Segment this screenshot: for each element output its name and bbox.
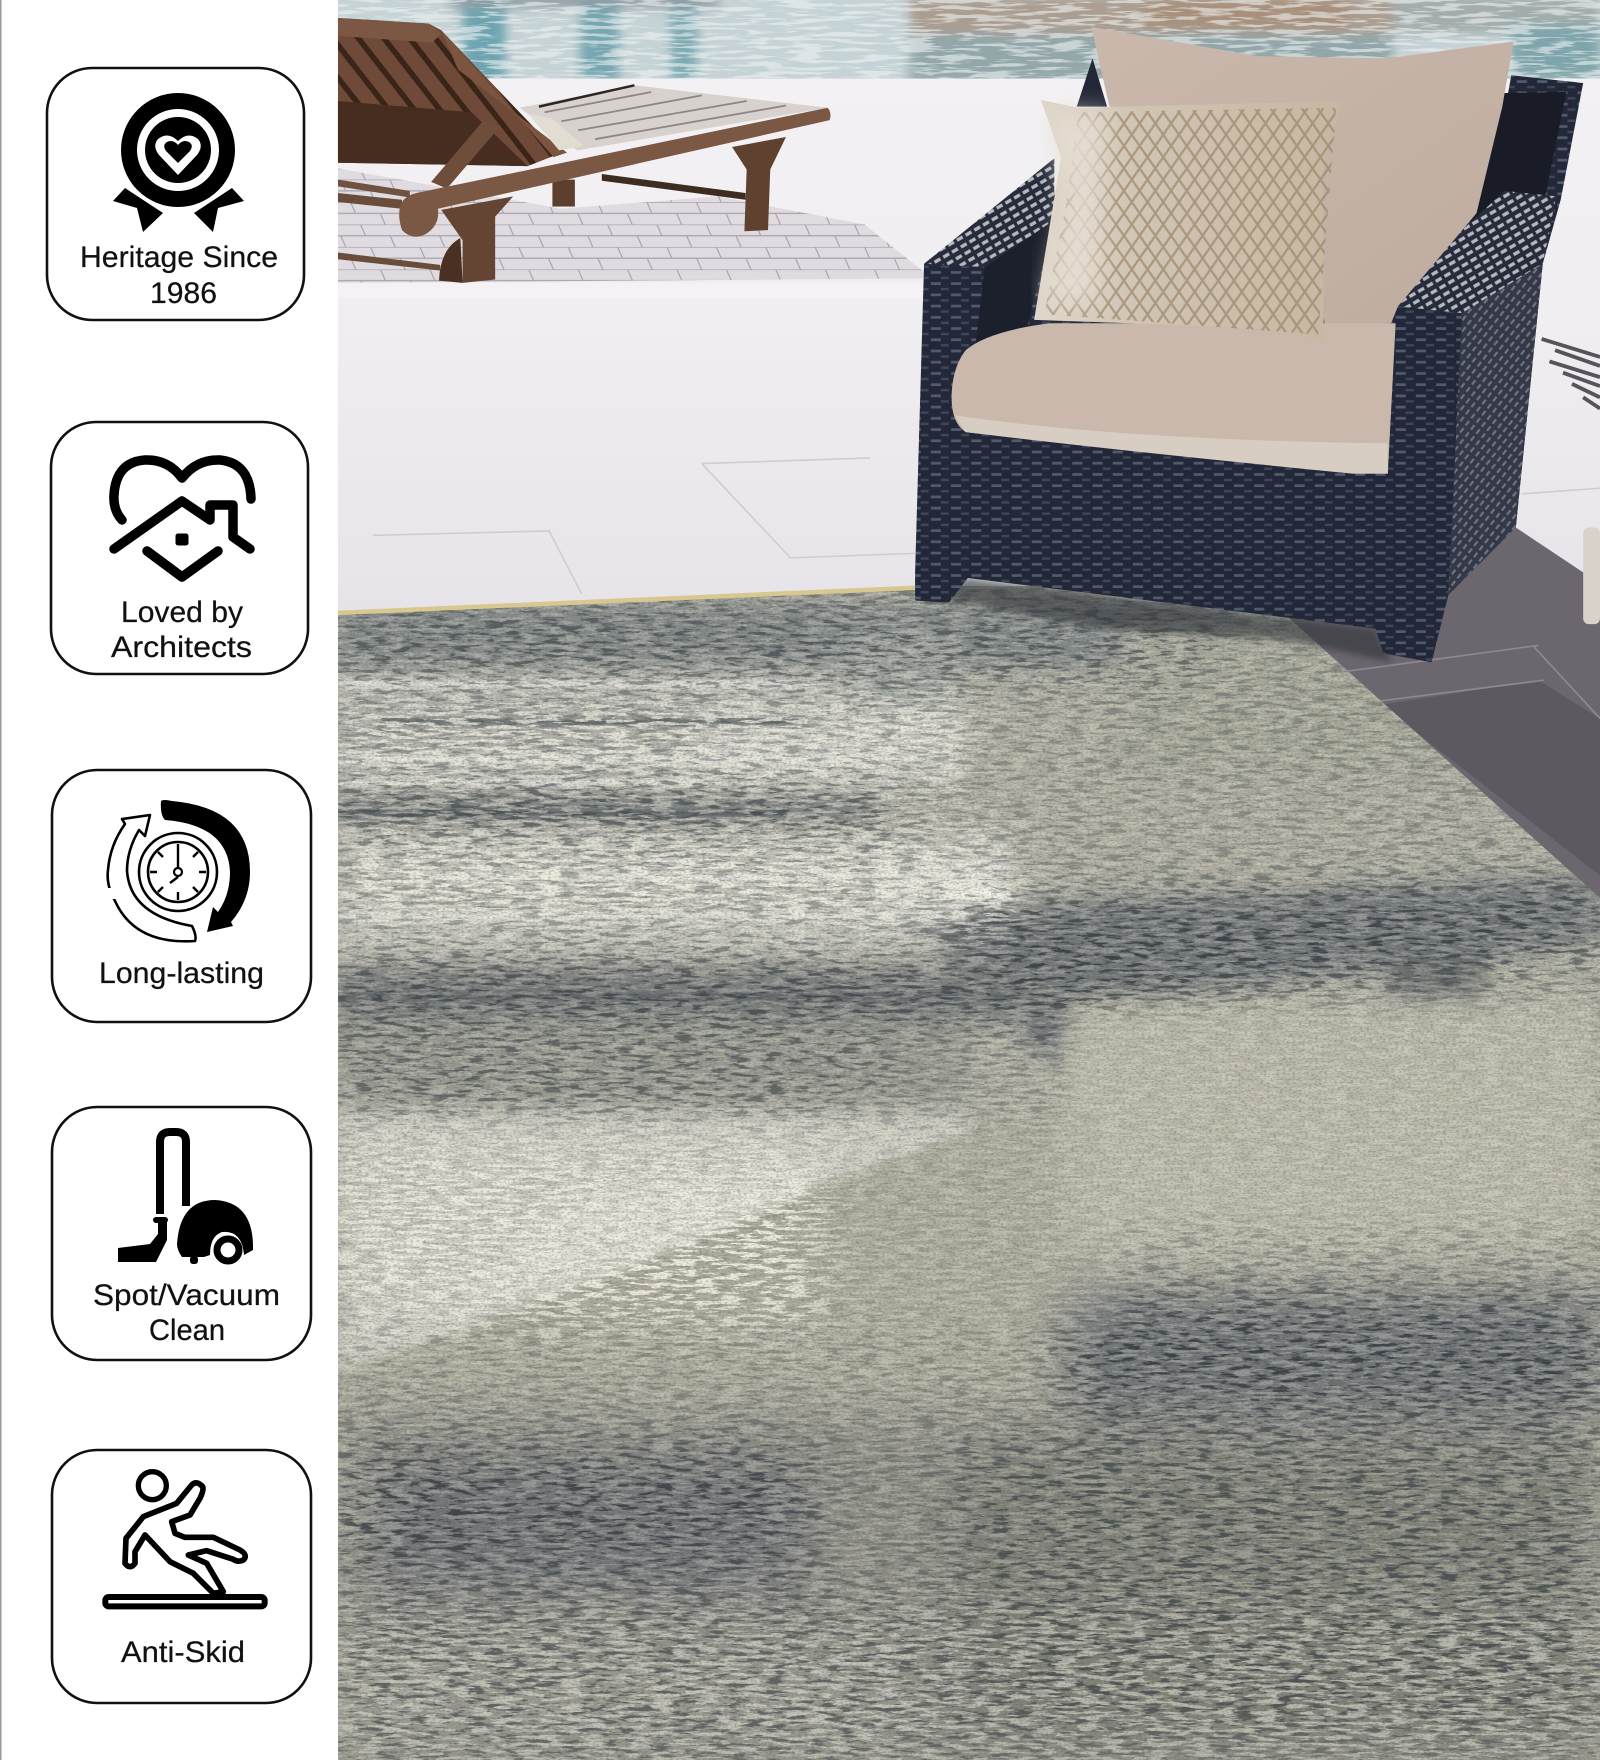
main board [399, 108, 831, 237]
throw pillow [1034, 100, 1342, 341]
rods [602, 174, 746, 200]
icon: award badge with heart [113, 101, 244, 232]
label: Clean [149, 1314, 225, 1347]
card outline [52, 1107, 311, 1360]
panel: lifestyle photo of rug and outdoor chair [338, 0, 1600, 1760]
photo: dark floor [1278, 528, 1600, 904]
rug speckle: light [338, 584, 1600, 1760]
panel: Anti-Skid [52, 1450, 311, 1703]
label [111, 596, 252, 664]
left arm top [924, 158, 1054, 267]
photo: pool water [338, 0, 1600, 85]
photo: white ledge shade [338, 283, 933, 299]
icon: heart and house [114, 460, 251, 577]
photo: wicker armchair [915, 27, 1583, 662]
label: Heritage Since [80, 241, 278, 274]
legs [732, 137, 786, 231]
photo: chair shadow on rug [921, 578, 1392, 662]
panel: Long-lasting [52, 770, 311, 1022]
card outline [52, 770, 311, 1022]
rug tone: dark lower patches [338, 1291, 1600, 1760]
seat cushion [952, 323, 1396, 474]
label: Long-lasting [99, 957, 264, 990]
seat slats [520, 85, 828, 150]
label [93, 1279, 280, 1347]
photo: rug gold edge [338, 587, 932, 613]
photo: paving stones [338, 168, 932, 283]
cushion [528, 113, 584, 150]
chair body [1077, 58, 1107, 107]
panel: Loved by Architects [51, 422, 308, 674]
photo: right tile [1542, 339, 1600, 409]
photo: floor tiles [373, 458, 915, 594]
label: Anti-Skid [121, 1636, 245, 1669]
label: 1986 [150, 277, 217, 310]
card outline [51, 422, 308, 674]
photo: deck [338, 79, 1600, 617]
back frame inner [1460, 92, 1566, 269]
rug speckle: fine grain [338, 584, 1600, 1760]
photo: patterned rug [338, 584, 1600, 1760]
label: Loved by [121, 596, 243, 629]
rug tone: sunlit zones [338, 601, 1600, 1381]
card outline [52, 1450, 311, 1703]
label [80, 241, 278, 310]
icon: clock with circular arrows [103, 800, 250, 941]
backrest [338, 18, 559, 166]
background sidebar [0, 0, 338, 1760]
rug speckle: dark [338, 584, 1600, 1760]
label: Architects [111, 631, 252, 664]
back cushion [1091, 27, 1514, 326]
right arm [1448, 264, 1543, 595]
rug tone: shadowed lower area [339, 1134, 979, 1390]
panel: Spot/Vacuum Clean [52, 1107, 311, 1360]
rug tone: bright sun patch [479, 1168, 814, 1292]
rug tone: streaks [338, 680, 1012, 1000]
card outline [47, 68, 304, 320]
photo: wooden lounger [338, 18, 831, 283]
panel: Heritage Since 1986 [47, 68, 304, 320]
icon: slipping figure [105, 1472, 265, 1606]
icon: vacuum cleaner [118, 1132, 253, 1264]
label: Spot/Vacuum [93, 1279, 280, 1312]
